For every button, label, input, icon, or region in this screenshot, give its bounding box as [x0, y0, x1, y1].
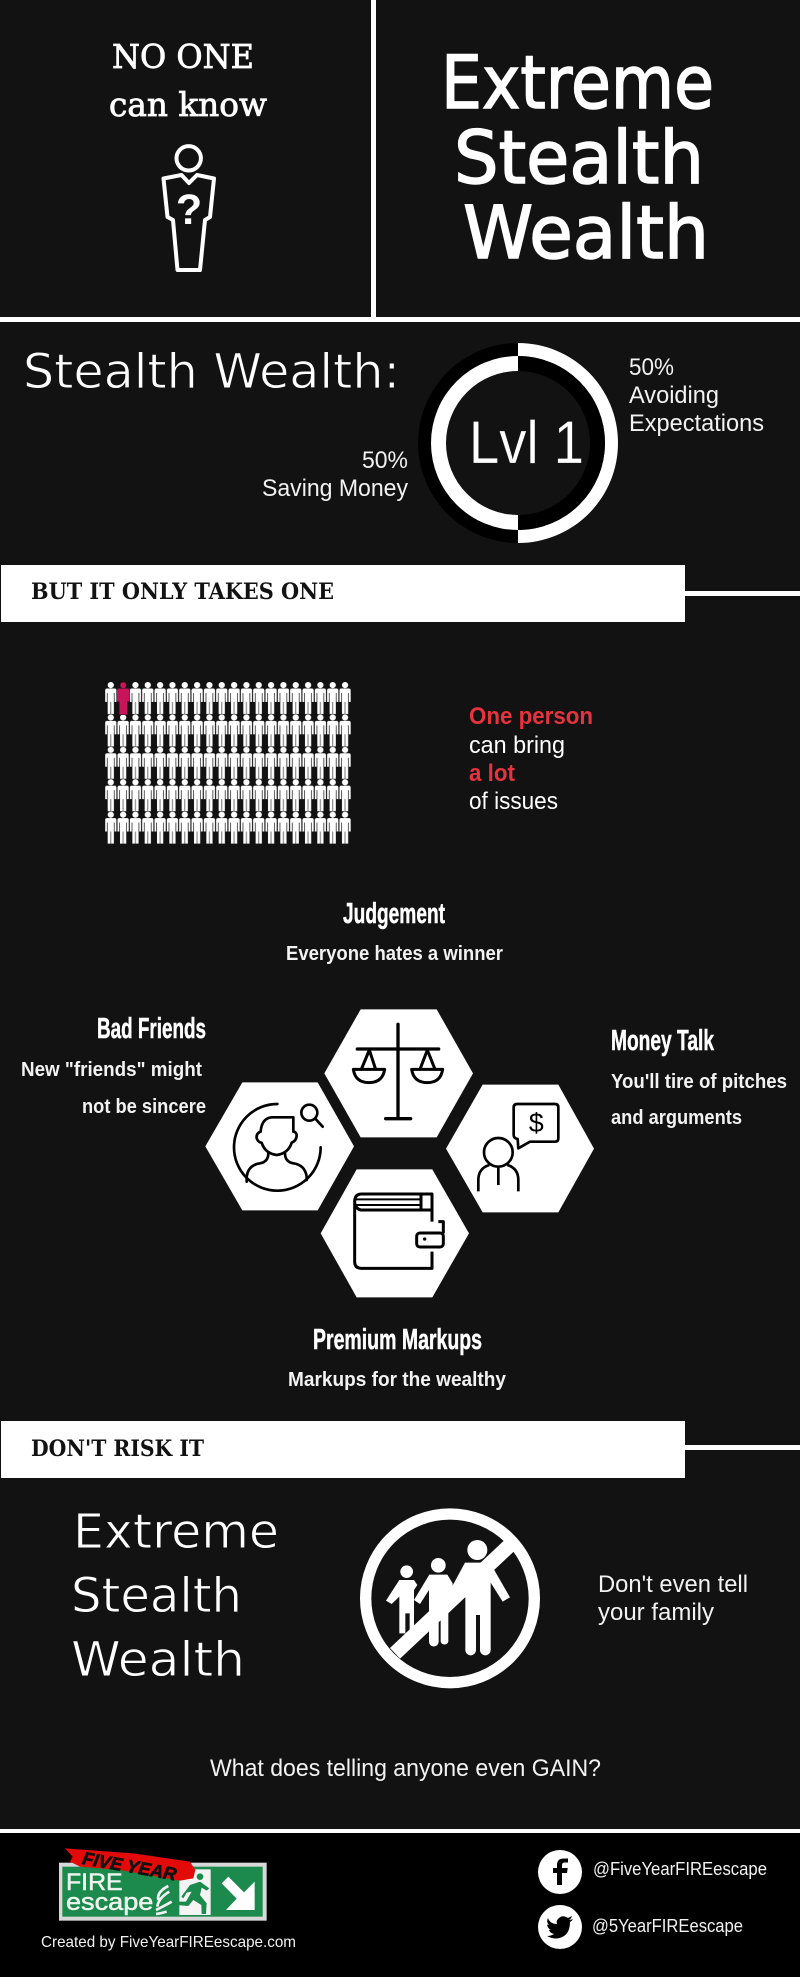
logo: five year fire escape: FIVE YEAR: [81, 1848, 178, 1884]
heading: extreme stealth wealth: Wealth: [71, 1632, 245, 1688]
panel: footer: [0, 1829, 800, 1977]
icon: scales hexagon: [324, 1009, 473, 1137]
label: money talk: [611, 1025, 787, 1129]
label: bad friends: Bad Friends: [97, 1013, 206, 1045]
banner: don't risk it: [1, 1421, 800, 1478]
heading: extreme stealth wealth: [71, 1504, 279, 1688]
label: money talk: Money Talk: [611, 1025, 715, 1057]
heading: extreme stealth wealth: Extreme: [73, 1504, 279, 1560]
logo: five year fire escape: [59, 1848, 267, 1921]
icon: family prohibited: [366, 1514, 534, 1683]
label: premium markups: Premium Markups: [313, 1324, 482, 1356]
text block: don't even tell your family: your family: [598, 1599, 714, 1626]
label: avoiding expectations: Expectations: [629, 410, 764, 437]
text block: created by: Created by FiveYearFIREescape.com: [41, 1934, 296, 1951]
text: twitter handle: @5YearFIREescape: [592, 1916, 743, 1936]
banner: don't risk it: DON'T RISK IT: [31, 1436, 205, 1462]
text block: one person can bring a lot of issues: a lot: [469, 760, 515, 787]
label: premium markups: [288, 1324, 507, 1391]
label: avoiding expectations: [629, 354, 764, 437]
label: saving money: Saving Money: [262, 475, 408, 502]
chart: level donut: Lvl 1: [469, 409, 584, 476]
text block: what does telling anyone even gain: What does telling anyone even GAIN?: [210, 1755, 601, 1782]
text block: one person can bring a lot of issues: [469, 703, 593, 815]
icon: person with question mark: ?: [176, 186, 202, 234]
label: avoiding expectations: Avoiding: [629, 382, 719, 409]
logo: five year fire escape: escape: [66, 1889, 153, 1916]
text block: one person can bring a lot of issues: of issues: [469, 788, 558, 815]
label: avoiding expectations: 50%: [629, 354, 674, 381]
label: judgement: Judgement: [343, 898, 445, 930]
icon: person search hexagon: [205, 1082, 354, 1210]
heading: stealth wealth: Stealth Wealth:: [23, 344, 400, 400]
text block: one person can bring a lot of issues: One person: [469, 703, 593, 730]
heading: no one can know: [109, 37, 267, 124]
text block: don't even tell your family: [598, 1571, 748, 1626]
label: saving money: [262, 447, 408, 502]
icon: money talk hexagon: [446, 1085, 594, 1212]
chart: level donut: [418, 343, 618, 543]
heading: no one can know: can know: [109, 85, 267, 124]
text block: one person can bring a lot of issues: can bring: [469, 732, 565, 759]
panel: stealth wealth level: [23, 343, 764, 543]
icon group: hexagons: [205, 1009, 594, 1297]
banner: but it only takes one: BUT IT ONLY TAKES ONE: [31, 579, 334, 605]
icon: wallet hexagon: [321, 1169, 469, 1297]
chart: crowd of 100 people with one highlighted: [105, 682, 351, 844]
text: facebook handle: @FiveYearFIREescape: [593, 1859, 767, 1879]
label: judgement: Everyone hates a winner: [286, 943, 503, 965]
label: bad friends: New "friends" might: [21, 1059, 202, 1081]
icon: facebook: [538, 1850, 582, 1894]
label: judgement: [286, 898, 503, 965]
text block: don't even tell your family: Don't even tell: [598, 1571, 748, 1598]
icon: person with question mark: [164, 146, 214, 270]
label: bad friends: not be sincere: [82, 1096, 206, 1118]
icon: twitter: [538, 1905, 582, 1949]
icon: money talk hexagon: $: [529, 1108, 544, 1138]
label: premium markups: Markups for the wealthy: [288, 1369, 507, 1391]
heading: extreme stealth wealth: Stealth: [71, 1568, 242, 1624]
label: saving money: 50%: [362, 447, 408, 474]
title: extreme stealth wealth: Stealth: [454, 116, 704, 201]
panel: header: [0, 0, 800, 322]
logo: five year fire escape: FIRE: [66, 1869, 123, 1896]
title: extreme stealth wealth: Wealth: [463, 191, 709, 276]
heading: no one can know: NO ONE: [112, 37, 254, 76]
label: money talk: You'll tire of pitches: [611, 1071, 787, 1093]
label: money talk: and arguments: [611, 1107, 742, 1129]
banner: but it only takes one: [1, 565, 800, 622]
title: extreme stealth wealth: Extreme: [441, 41, 714, 126]
label: bad friends: [21, 1013, 206, 1118]
title: extreme stealth wealth: [441, 41, 714, 276]
